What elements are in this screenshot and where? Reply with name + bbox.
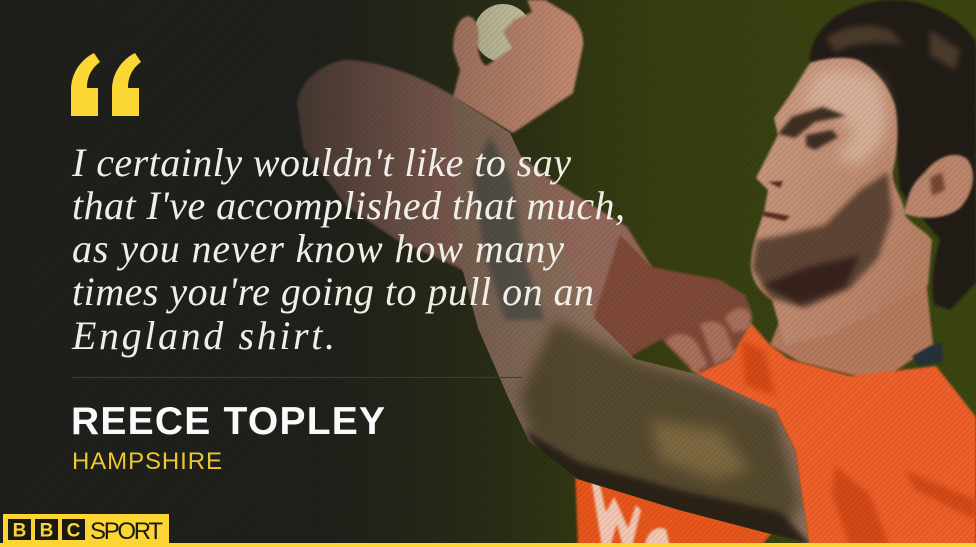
SPORT wordmark: SPORT (90, 518, 163, 545)
eyebrow and eye (778, 107, 846, 150)
quote text: England shirt. (71, 313, 335, 358)
tattoo dark band (525, 430, 812, 546)
ball (474, 4, 532, 62)
hair highlights (826, 26, 960, 70)
tattoo highlight (650, 420, 750, 480)
shirt lower body (575, 420, 800, 547)
divider (72, 377, 522, 378)
county: HAMPSHIRE (72, 448, 222, 475)
arm base (440, 90, 820, 547)
forehead highlight (800, 69, 886, 165)
fingers (665, 308, 752, 373)
photo: cricketer bowling (297, 0, 976, 547)
logo tab (3, 514, 169, 544)
inner ear (930, 172, 945, 196)
shirt logo lettering (591, 476, 670, 547)
ear (903, 155, 973, 218)
footer bar (0, 543, 976, 547)
quote text: as you never know how many (72, 226, 564, 271)
quote text: that I've accomplished that much, (72, 183, 625, 228)
beard (752, 172, 892, 308)
quote text (71, 140, 625, 358)
shirt folds (742, 340, 976, 547)
BBC letters: C (67, 520, 81, 542)
quote mark icon (71, 53, 141, 116)
collar trim (912, 343, 943, 366)
BBC letters: B (40, 520, 53, 542)
quote text: I certainly wouldn't like to say (71, 140, 571, 185)
far arm elbow (297, 60, 652, 356)
face (751, 58, 932, 345)
BBC blocks (8, 519, 31, 540)
BBC Sport logo (3, 514, 169, 545)
quote text: times you're going to pull on an (72, 269, 594, 314)
neck (770, 240, 933, 382)
nostril and mouth (762, 181, 790, 221)
BBC letters: B (13, 520, 26, 542)
BBC letters (13, 520, 81, 542)
hair (810, 0, 976, 310)
beard shadow (763, 255, 860, 304)
shirt collar and shoulder (690, 322, 976, 547)
throwing fist (453, 0, 583, 133)
name: REECE TOPLEY (71, 400, 385, 443)
tattooed arm (440, 90, 820, 547)
wrist tattoo (472, 135, 545, 320)
bowling hand (590, 235, 752, 373)
sleeve tattoo (520, 320, 800, 530)
